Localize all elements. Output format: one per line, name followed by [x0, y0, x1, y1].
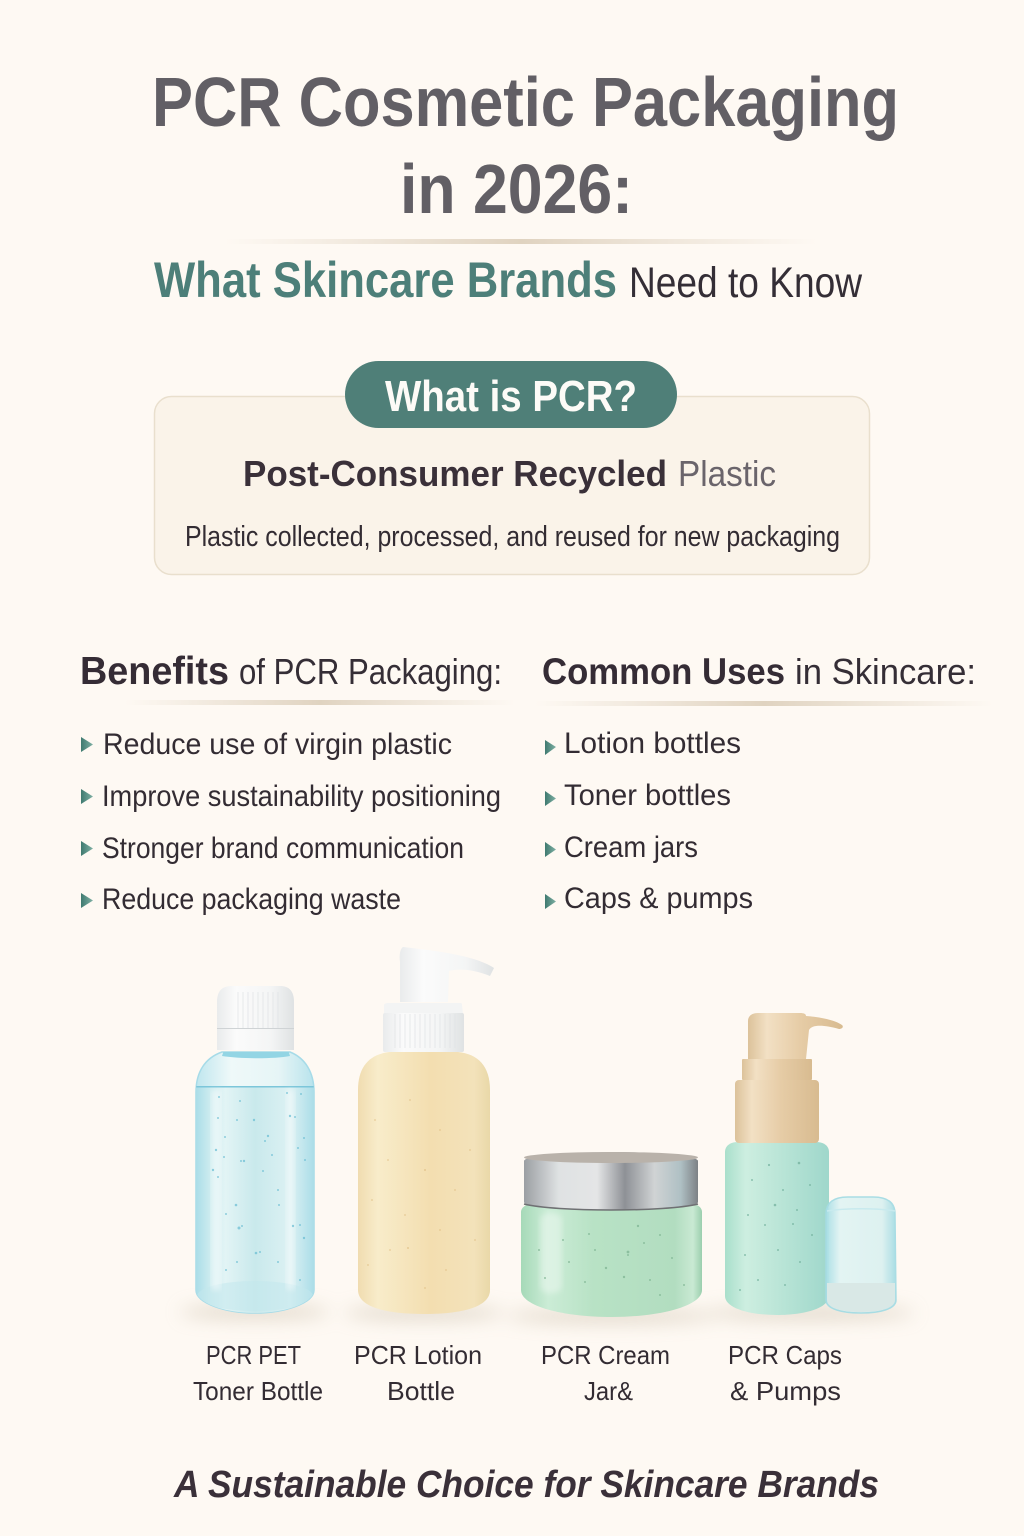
benefits list: Improve sustainability positioning: [102, 780, 501, 813]
common uses list: Cream jars: [564, 831, 698, 864]
panel: what is PCR: [154, 361, 870, 574]
benefits heading: of PCR Packaging:: [239, 651, 502, 692]
product: pump bottle: [725, 1013, 843, 1315]
toner cap: [217, 986, 294, 1050]
subtitle: What Skincare Brands: [154, 252, 617, 308]
pump head: [735, 1013, 843, 1143]
caption: caps and pumps: & Pumps: [730, 1376, 841, 1406]
title: in 2026:: [400, 150, 633, 228]
benefits heading: Benefits: [80, 650, 229, 693]
benefits list: Stronger brand communication: [102, 832, 464, 865]
product: lotion bottle: [358, 947, 494, 1314]
benefits heading: [80, 650, 502, 693]
product: cream jar: [521, 1152, 702, 1317]
title: [152, 63, 899, 228]
jar lid: [524, 1152, 698, 1210]
pill heading: What is PCR?: [385, 372, 637, 421]
common uses heading: in Skincare:: [795, 651, 976, 692]
caption: cream jar: [541, 1340, 670, 1406]
definition heading: Post-Consumer Recycled: [243, 453, 667, 494]
caption: cream jar: PCR Cream: [541, 1340, 670, 1370]
caption: lotion bottle: Bottle: [387, 1376, 455, 1406]
panel: common uses: [535, 651, 993, 915]
benefits list: Reduce packaging waste: [102, 883, 401, 916]
product captions: [193, 1340, 842, 1406]
definition text: Plastic collected, processed, and reused for new packaging: [185, 521, 840, 553]
definition heading: Plastic: [678, 453, 776, 494]
subtitle: Need to Know: [629, 259, 863, 307]
caption: cream jar: Jar&: [584, 1376, 633, 1406]
title: PCR Cosmetic Packaging: [152, 63, 899, 141]
caption: toner bottle: [193, 1340, 323, 1406]
caption: caps and pumps: PCR Caps: [728, 1340, 842, 1370]
caption: caps and pumps: [728, 1340, 842, 1406]
lotion pump: [383, 947, 494, 1052]
benefits list: [81, 728, 501, 916]
common uses list: Lotion bottles: [564, 727, 741, 760]
product shadows: [180, 1305, 915, 1323]
common uses list: [545, 727, 753, 915]
pill heading: [345, 361, 677, 428]
caption: toner bottle: Toner Bottle: [193, 1376, 323, 1406]
caption: toner bottle: PCR PET: [206, 1340, 301, 1370]
footer tagline: A Sustainable Choice for Skincare Brands: [173, 1464, 879, 1506]
common uses heading: Common Uses: [542, 651, 785, 692]
common uses heading: [542, 651, 976, 692]
product: clear cap: [826, 1197, 896, 1313]
caption: lotion bottle: [354, 1340, 482, 1406]
benefits list: Reduce use of virgin plastic: [103, 728, 452, 761]
common uses list: Caps & pumps: [564, 882, 753, 915]
product: toner bottle: [196, 986, 314, 1316]
common uses list: Toner bottles: [564, 779, 731, 812]
panel: benefits: [80, 650, 515, 916]
caption: lotion bottle: PCR Lotion: [354, 1340, 482, 1370]
